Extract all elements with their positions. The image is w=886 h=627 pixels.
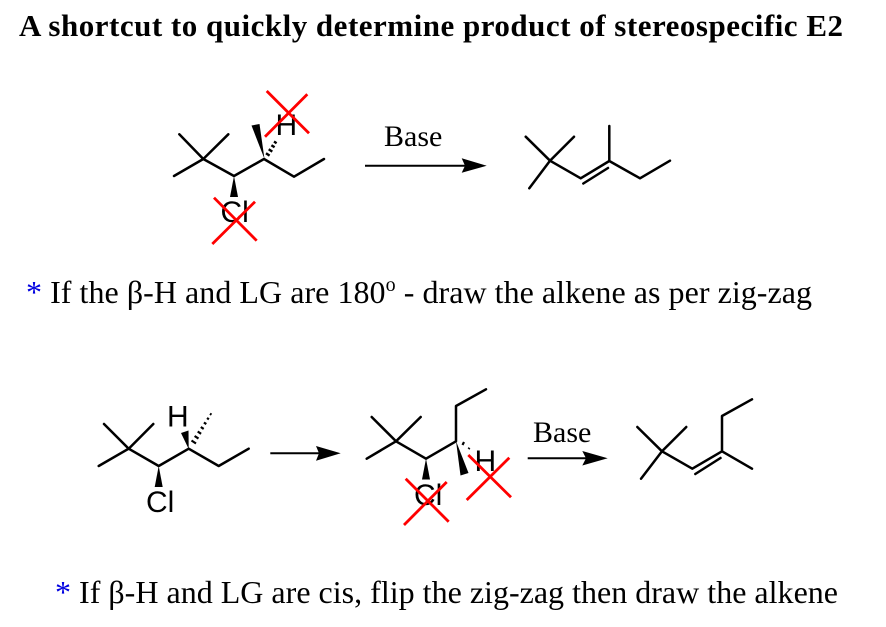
note 1: anti-periplanar rule: o: [386, 274, 396, 296]
note 1: anti-periplanar rule: - draw the alkene as per zig-zag: [396, 274, 812, 310]
reactant molecule 1 with crossed H and Cl: [174, 91, 324, 244]
product alkene 2: [637, 399, 752, 479]
flipped molecule with crossed H and Cl: Cl: [414, 479, 442, 512]
reaction arrow 1 with Base label: [365, 120, 487, 173]
reactant molecule 2: H: [167, 400, 189, 434]
reaction arrow 1 with Base label: Base: [384, 120, 442, 153]
reaction arrow 2 with Base label: [528, 416, 608, 466]
arrow: flip the zig-zag: [270, 446, 341, 461]
flipped molecule with crossed H and Cl: [367, 389, 511, 525]
reaction arrow 2 with Base label: Base: [533, 416, 591, 449]
reactant molecule 2: Cl: [146, 486, 174, 519]
flipped molecule with crossed H and Cl: H: [474, 445, 496, 478]
note 1: anti-periplanar rule: * If the β-H and LG are 180: [26, 274, 386, 310]
reactant molecule 1 with crossed H and Cl: Cl: [220, 196, 249, 229]
reactant molecule 1 with crossed H and Cl: H: [276, 109, 297, 142]
product alkene 1: [526, 126, 670, 188]
title: A shortcut to quickly determine product of stereospecific E2: [19, 8, 843, 43]
note 2: cis rule: * If β-H and LG are cis, flip the zig-zag then draw the alkene: [55, 574, 838, 610]
reactant molecule 2: [99, 400, 249, 519]
